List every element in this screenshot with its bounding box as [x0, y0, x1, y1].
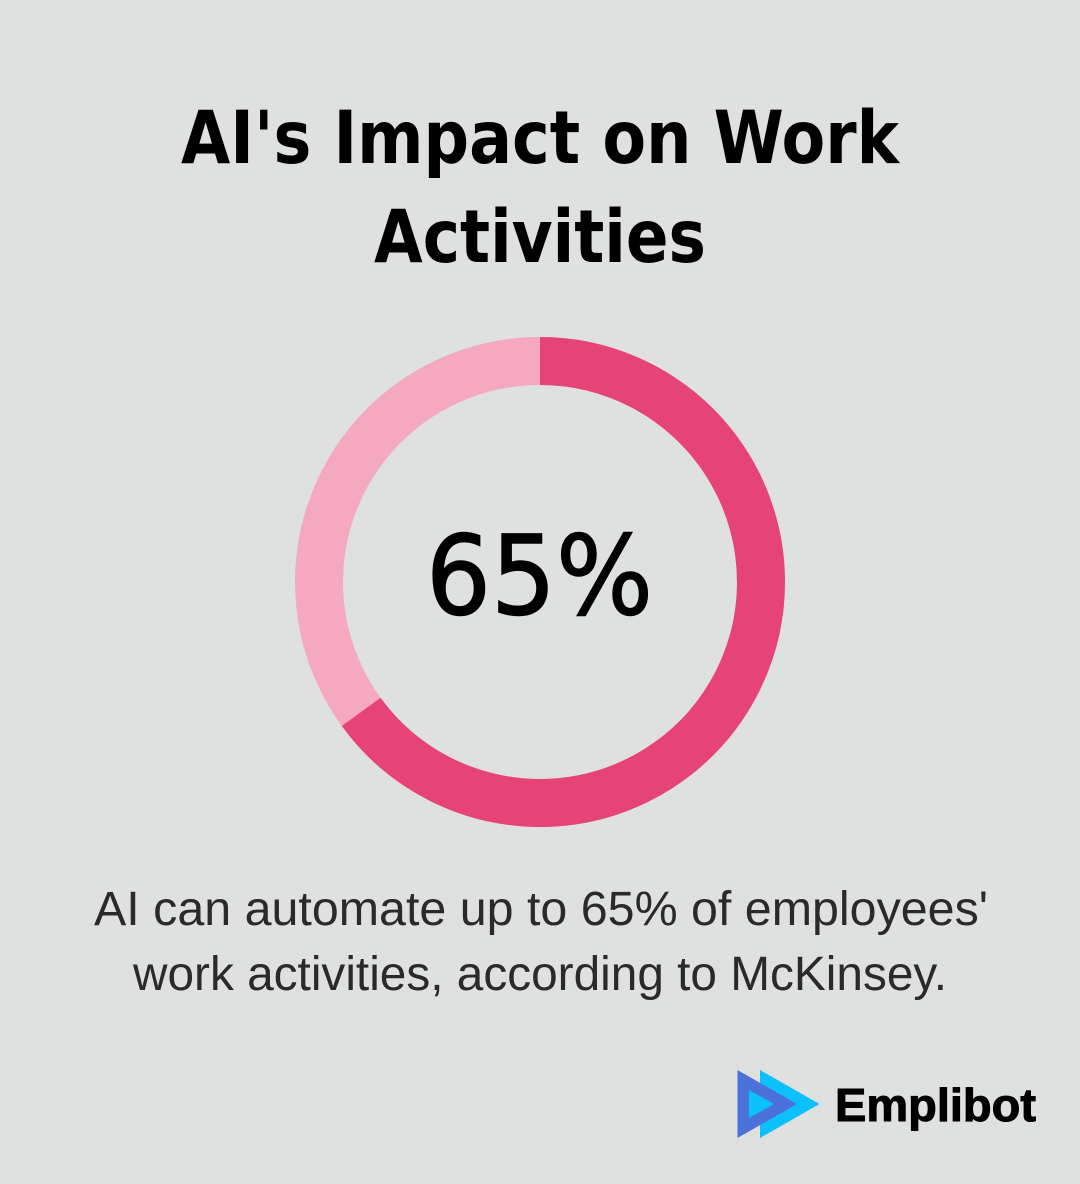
title: Activities — [374, 195, 706, 280]
donut value: 65% — [426, 512, 653, 640]
description text: work activities, according to McKinsey. — [132, 948, 947, 1001]
description text — [94, 883, 988, 1001]
title: AI's Impact on Work — [181, 96, 900, 181]
donut chart: 65% — [319, 361, 761, 803]
title — [181, 96, 900, 280]
brand name: Emplibot — [835, 1079, 1036, 1131]
description text: AI can automate up to 65% of employees' — [94, 883, 988, 936]
icon: Emplibot logo mark — [738, 1070, 820, 1138]
